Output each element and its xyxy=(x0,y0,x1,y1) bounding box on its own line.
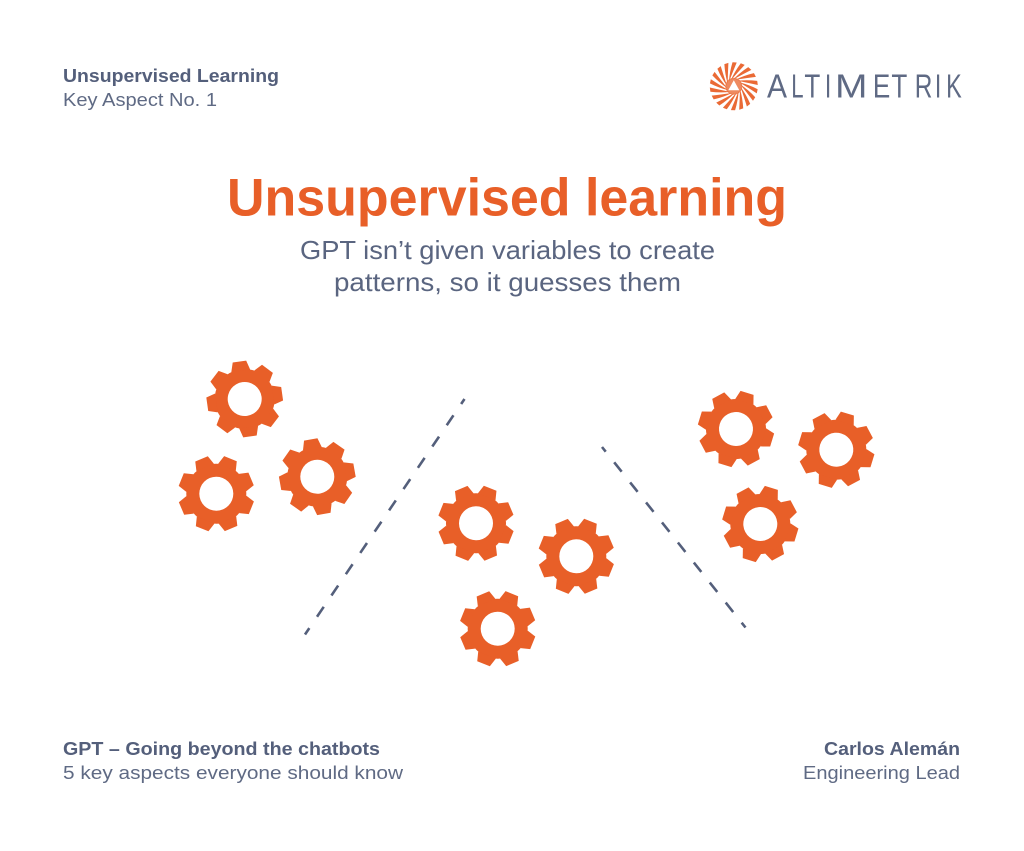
footer: series title xyxy=(63,738,404,783)
logo wordmark: I xyxy=(825,69,831,106)
subtitle: patterns, so it guesses them xyxy=(334,267,681,297)
dashed divider: right xyxy=(602,447,746,628)
header: topic and aspect number: Unsupervised Learning xyxy=(63,65,279,86)
dashed divider: left xyxy=(305,399,464,634)
header: topic and aspect number: Key Aspect No. 1 xyxy=(63,89,217,110)
logo wordmark: R xyxy=(915,69,932,106)
footer: series title: GPT – Going beyond the chatbots xyxy=(63,738,380,759)
footer: author: Carlos Alemán xyxy=(824,738,960,759)
footer: series title: 5 key aspects everyone should know xyxy=(63,762,404,783)
logo wordmark: I xyxy=(935,69,941,106)
logo wordmark: E xyxy=(873,69,890,105)
footer: author xyxy=(803,738,960,783)
icon: sunburst xyxy=(708,61,759,112)
logo wordmark: L xyxy=(791,68,804,105)
header: topic and aspect number xyxy=(63,65,279,110)
logo wordmark xyxy=(767,67,962,106)
subtitle xyxy=(300,235,715,297)
gear cluster: centre xyxy=(427,474,626,678)
logo wordmark: M xyxy=(835,68,867,105)
subtitle: GPT isn’t given variables to create xyxy=(300,235,715,265)
logo wordmark: T xyxy=(804,69,820,105)
gear cluster: left xyxy=(167,356,361,543)
logo wordmark: T xyxy=(891,69,907,105)
title: Unsupervised learning xyxy=(227,168,787,228)
logo wordmark: A xyxy=(767,67,787,105)
gear cluster: right xyxy=(689,382,883,571)
logo: Altimetrik xyxy=(708,61,962,112)
logo wordmark: K xyxy=(946,69,962,106)
footer: author: Engineering Lead xyxy=(803,762,960,783)
